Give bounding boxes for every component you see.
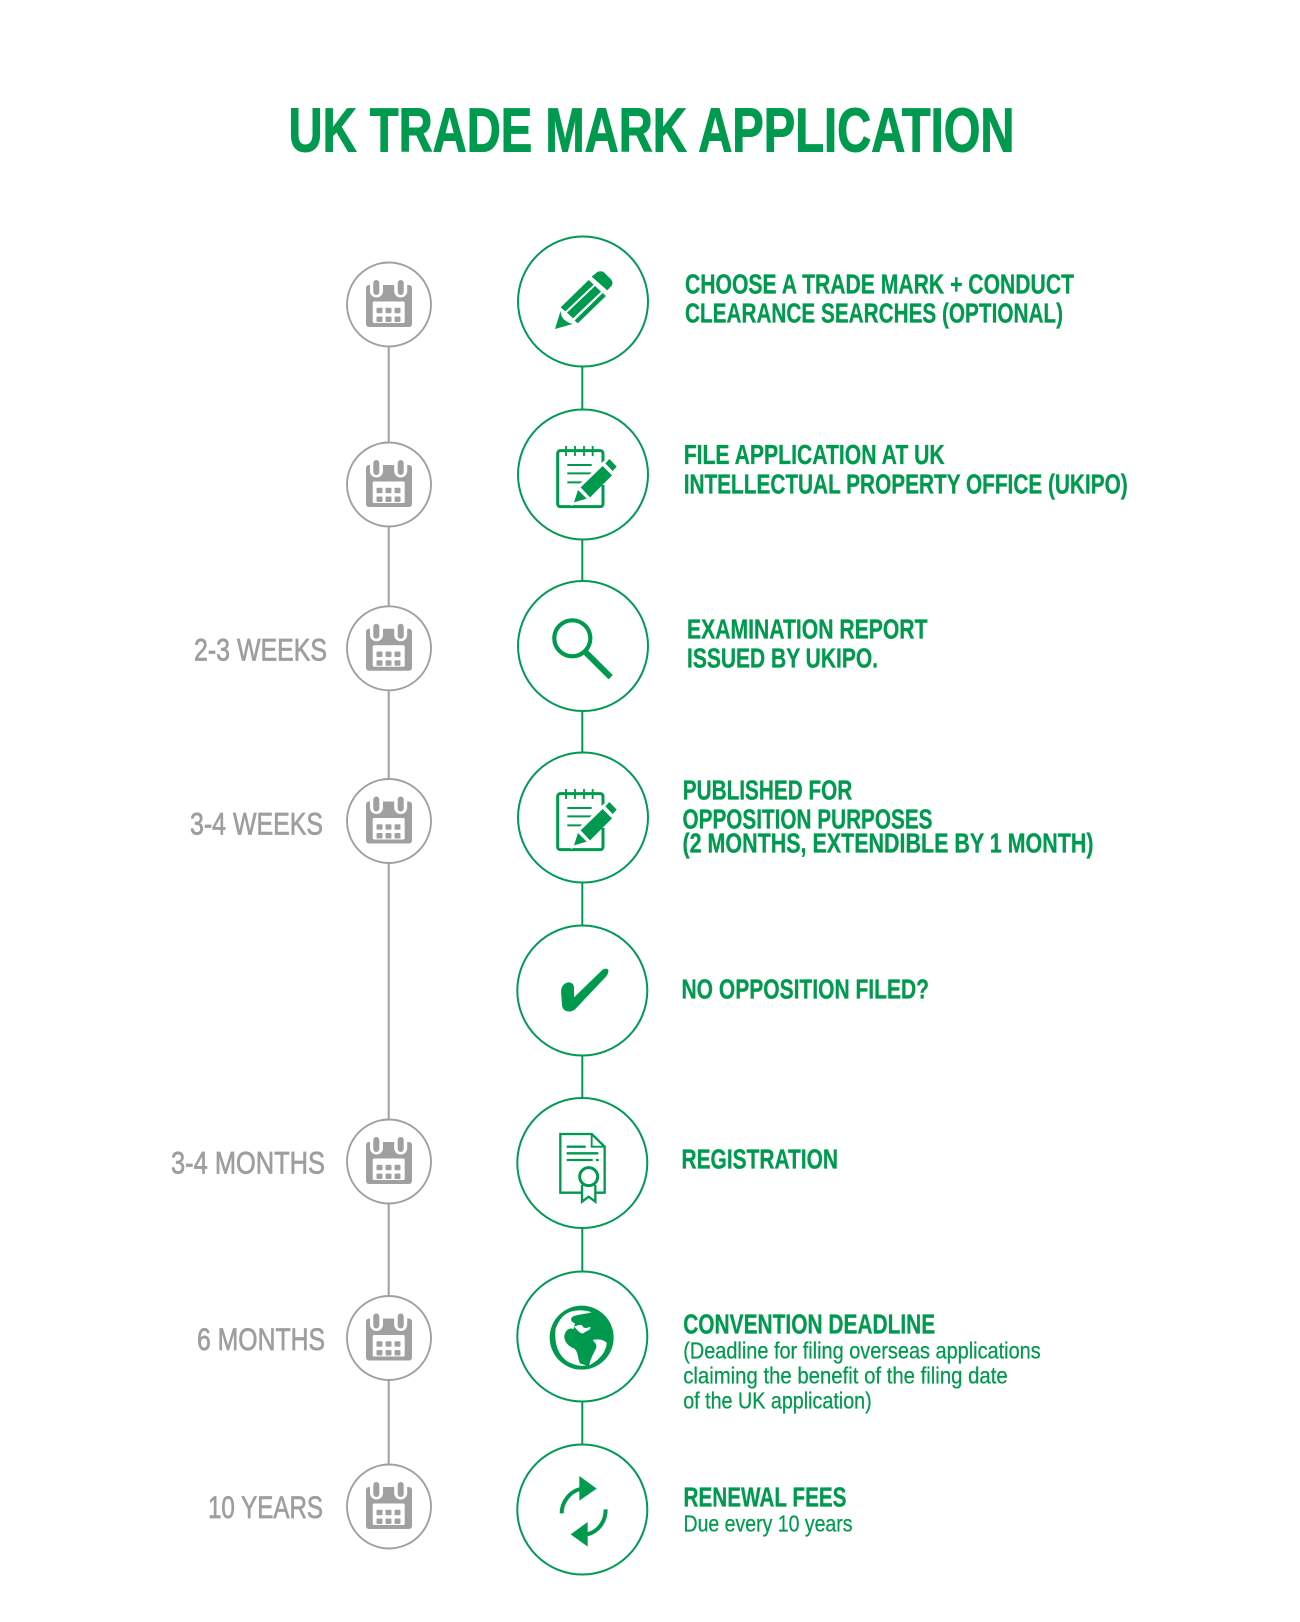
step 1 text: CLEARANCE SEARCHES (OPTIONAL): [685, 297, 1063, 328]
timeline marker: 6 months: 6 MONTHS: [197, 1321, 325, 1357]
step 4 text: (2 MONTHS, EXTENDIBLE BY 1 MONTH): [682, 827, 1094, 858]
title: UK TRADE MARK APPLICATION: [288, 96, 1014, 166]
timeline marker: 2-3 weeks: [194, 606, 431, 690]
step 7 text: CONVENTION DEADLINE: [683, 1308, 935, 1339]
step 8 text: RENEWAL FEES: [684, 1482, 846, 1513]
step 2 text: INTELLECTUAL PROPERTY OFFICE (UKIPO): [684, 468, 1128, 499]
step 4 text: [682, 774, 1094, 858]
step 2 text: [684, 439, 1128, 499]
step 6: registration: [517, 1098, 838, 1228]
icon: check mark: [561, 969, 608, 1012]
step 7 text: [683, 1308, 1041, 1413]
timeline marker: 6 months: [197, 1296, 431, 1380]
step 8: renewal fees: [517, 1444, 852, 1574]
step 3 text: [687, 613, 928, 673]
step 7: convention deadline: [517, 1272, 1041, 1413]
timeline marker: 3-4 weeks: [190, 779, 431, 863]
icon: notepad and pencil: [558, 446, 620, 507]
timeline marker: 3-4 months: 3-4 MONTHS: [171, 1144, 325, 1180]
step 7 text: claiming the benefit of the filing date: [683, 1362, 1008, 1388]
step 8 text: Due every 10 years: [684, 1510, 852, 1536]
connector: grey time line: [388, 304, 390, 1506]
icon: notepad and pencil: [558, 789, 620, 850]
step 3: examination report: [518, 581, 928, 711]
icon: renewal arrows: [562, 1476, 606, 1547]
connector: green process line: [581, 301, 583, 1509]
icon: globe: [550, 1306, 614, 1370]
step 4: published for opposition: [518, 752, 1094, 882]
timeline marker: 10 years: 10 YEARS: [208, 1489, 323, 1525]
step 7 text: of the UK application): [683, 1387, 872, 1413]
step 3 text: ISSUED BY UKIPO.: [687, 642, 878, 673]
step 1 text: CHOOSE A TRADE MARK + CONDUCT: [685, 268, 1074, 300]
icon: certificate: [560, 1134, 605, 1202]
timeline marker: 3-4 weeks: 3-4 WEEKS: [190, 805, 323, 841]
step 2 text: FILE APPLICATION AT UK: [684, 439, 945, 470]
step 2: file application: [518, 410, 1128, 540]
step 7 text: (Deadline for filing overseas applications: [683, 1337, 1041, 1363]
icon: pencil: [555, 271, 613, 329]
step 8 text: [684, 1482, 852, 1536]
step 5 text: NO OPPOSITION FILED?: [682, 974, 929, 1004]
timeline marker: 3-4 months: [171, 1120, 431, 1204]
step 5: no opposition filed: [517, 926, 929, 1056]
timeline marker: 10 years: [208, 1464, 431, 1548]
timeline marker: 2-3 weeks: 2-3 WEEKS: [194, 632, 327, 668]
step 6 text: REGISTRATION: [682, 1144, 838, 1174]
icon: magnifying glass: [554, 620, 611, 677]
step 1 text: [685, 268, 1074, 328]
step 1: choose a trade mark: [518, 236, 1074, 366]
timeline marker: step 2 calendar: [347, 442, 431, 526]
step 3 text: EXAMINATION REPORT: [687, 613, 928, 644]
step 4 text: OPPOSITION PURPOSES: [682, 803, 932, 834]
step 4 text: PUBLISHED FOR: [683, 774, 852, 805]
timeline marker: step 1 calendar: [347, 262, 431, 346]
